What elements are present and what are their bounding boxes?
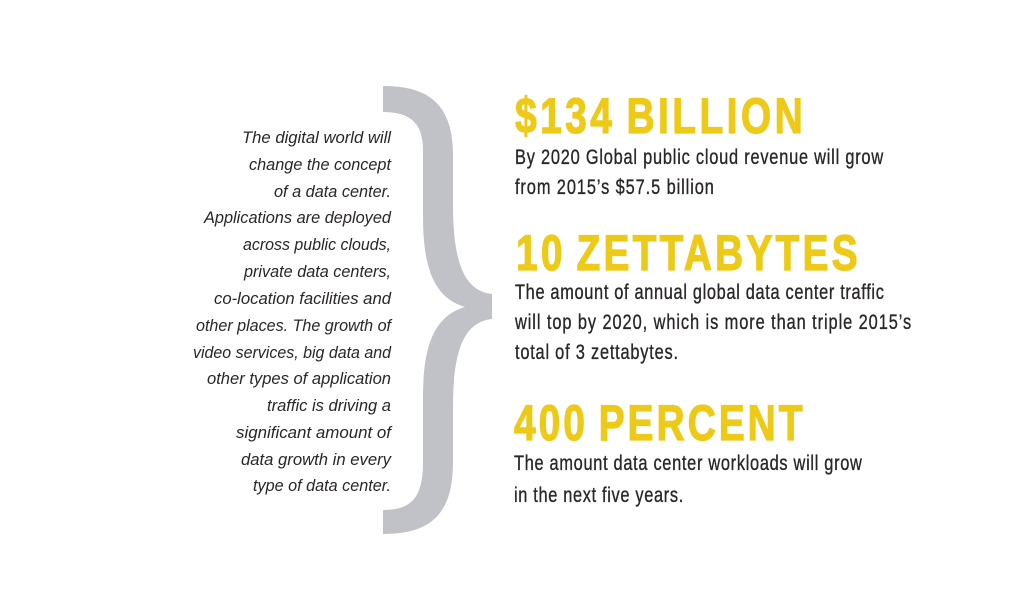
intro text block: change the concept [249,156,392,174]
stat: 10 zettabytes [514,224,911,363]
stat: 134 billion [515,87,883,198]
intro text block: video services, big data and [193,344,392,362]
stat: 400 percent [514,394,862,506]
description: public cloud revenue: from 2015’s $57.5 billion [515,175,714,198]
intro text block: traffic is driving a [267,397,391,415]
intro text block: co-location facilities and [214,290,392,308]
intro text block: private data centers, [243,263,391,281]
description: annual traffic: total of 3 zettabytes. [515,340,678,363]
intro text block: other types of application [207,370,391,388]
intro text block [193,129,393,495]
intro text block: of a data center. [274,183,391,201]
intro text block: type of data center. [253,477,391,495]
description: workloads: in the next five years. [514,483,683,506]
description: annual traffic [514,280,911,363]
description: public cloud revenue [515,145,883,198]
description: annual traffic: will top by 2020, which is more than triple 2015’s [514,310,911,333]
heading: 400 percent: 400 PERCENT [514,394,803,451]
intro text block: significant amount of [236,424,393,442]
description: workloads [514,451,862,506]
description: workloads: The amount data center workloads will grow [514,451,862,474]
description: public cloud revenue: By 2020 Global public cloud revenue will grow [515,145,883,168]
icon: large grey curly brace [383,86,492,534]
intro text block: Applications are deployed [203,209,392,227]
heading: 10 zettabytes: 10 ZETTABYTES [516,224,858,281]
intro text block: other places. The growth of [196,317,393,335]
intro text block: The digital world will [242,129,392,147]
description: annual traffic: The amount of annual global data center traffic [515,280,884,303]
heading: $134 billion: $134 BILLION [515,87,803,144]
intro text block: data growth in every [241,451,393,469]
intro text block: across public clouds, [243,236,391,254]
